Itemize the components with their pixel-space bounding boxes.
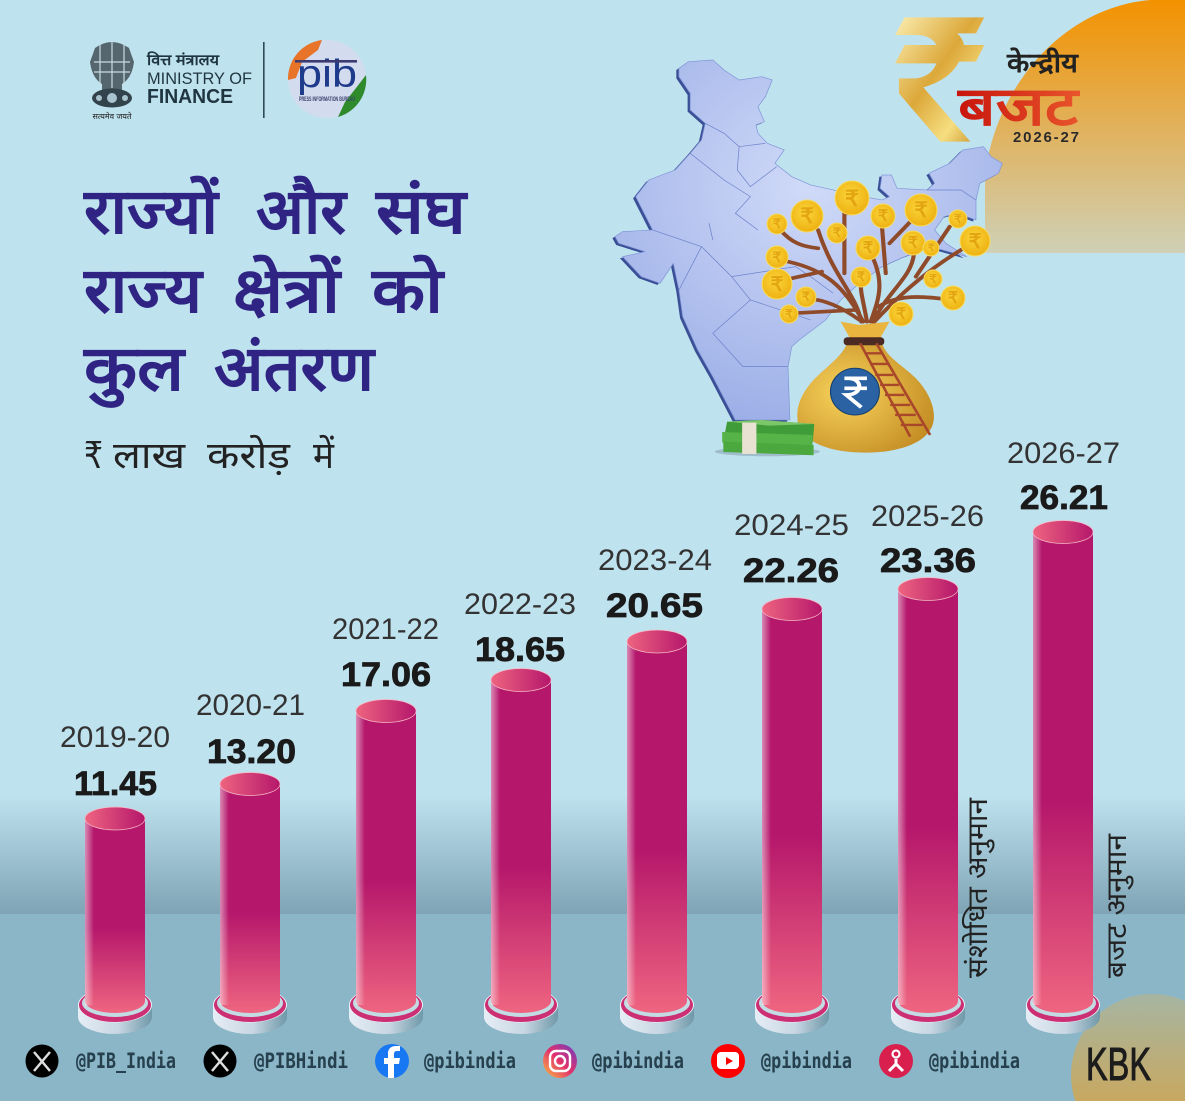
- gold coins: ₹: [800, 205, 814, 228]
- x handle india: [26, 1044, 176, 1078]
- title: संघ: [375, 177, 469, 247]
- gold coins: ₹: [896, 306, 906, 323]
- gold coins: ₹: [929, 272, 937, 286]
- gold coins: ₹: [845, 186, 859, 211]
- pib logo: pib: [297, 53, 357, 96]
- unit subtitle: में: [313, 434, 335, 476]
- illustration: budget logo: [895, 17, 1080, 146]
- bar: 2022-23: 2022-23: [464, 588, 576, 621]
- gold coins: ₹: [954, 212, 962, 226]
- orange corner panel: [985, 0, 1185, 253]
- ministry name: [146, 51, 252, 108]
- youtube handle: @pibindia: [761, 1049, 852, 1073]
- title: कुल: [83, 334, 186, 408]
- bar: 2019-20: 2019-20: [60, 721, 170, 754]
- bar: 2019-20: 11.45: [74, 765, 157, 803]
- illustration: india map with money tree: [612, 60, 1002, 456]
- bar: 2024-25: [734, 509, 849, 1034]
- budget wordmark: केन्द्रीय: [1006, 47, 1079, 78]
- gold coins: ₹: [773, 216, 782, 231]
- unit subtitle: लाख: [113, 435, 186, 476]
- bar: 2024-25: 22.26: [743, 552, 839, 590]
- bar: 2021-22: [332, 613, 439, 1034]
- gold coins: ₹: [857, 269, 866, 284]
- title: क्षेत्रों: [233, 254, 343, 326]
- pib logo: [288, 40, 366, 118]
- emblem caption: सत्यमेव जयते: [93, 111, 132, 121]
- facebook handle: [375, 1044, 516, 1078]
- x handle hindi: @PIBHindi: [254, 1049, 348, 1073]
- bar: 2023-24: 20.65: [606, 587, 703, 625]
- bar: 2024-25: 2024-25: [734, 509, 849, 542]
- budget wordmark: 2026-27: [1013, 129, 1079, 146]
- unit subtitle: ₹: [84, 435, 103, 476]
- bar: 2021-22: 2021-22: [332, 613, 439, 646]
- title: को: [371, 254, 446, 326]
- x handle india: @PIB_India: [76, 1049, 176, 1073]
- bar chart: [60, 437, 1134, 1034]
- unit subtitle: करोड़: [207, 434, 291, 476]
- gold coins: ₹: [802, 289, 811, 304]
- bar: 2026-27: [1007, 437, 1134, 1034]
- title: राज्यों: [83, 175, 221, 247]
- ministry name: MINISTRY OF: [147, 69, 252, 88]
- gold coins: ₹: [908, 235, 918, 252]
- bar: 2025-26: [871, 500, 995, 1034]
- gold coins: ₹: [833, 225, 842, 240]
- bar: 2025-26: 2025-26: [871, 500, 984, 533]
- bar: 2026-27: 2026-27: [1007, 437, 1120, 470]
- gold coins: ₹: [878, 208, 888, 225]
- money bag: [797, 322, 934, 453]
- gold coins: ₹: [928, 243, 935, 254]
- gold coins: ₹: [914, 199, 928, 222]
- bar: 2022-23: [464, 588, 576, 1034]
- x handle hindi: [204, 1044, 348, 1078]
- budget wordmark: [957, 47, 1080, 146]
- ministry of finance logo: [90, 40, 366, 121]
- pib logo: PRESS INFORMATION BUREAU: [299, 97, 355, 103]
- icon: state emblem: [90, 40, 134, 108]
- title: राज्य: [83, 256, 205, 326]
- gold coins: ₹: [948, 290, 958, 307]
- ministry name: वित्त मंत्रालय: [146, 51, 220, 69]
- bar: 2022-23: 18.65: [475, 631, 565, 669]
- gold coins: ₹: [771, 274, 784, 296]
- facebook handle: @pibindia: [424, 1049, 516, 1073]
- instagram handle: @pibindia: [592, 1049, 684, 1073]
- bar: 2020-21: 2020-21: [196, 689, 305, 722]
- india map: [612, 60, 1002, 422]
- gold coins: ₹: [785, 307, 793, 321]
- ministry name: FINANCE: [147, 86, 233, 108]
- note: budget estimate: बजट अनुमान: [1101, 834, 1134, 978]
- koo handle: @pibindia: [929, 1049, 1020, 1073]
- bar: 2021-22: 17.06: [341, 656, 431, 694]
- icon: golden rupee: [895, 17, 984, 142]
- unit subtitle: [84, 434, 335, 476]
- bar: 2023-24: [598, 544, 712, 1034]
- gold coins: ₹: [969, 231, 982, 253]
- bar: 2020-21: [196, 689, 305, 1034]
- bar: 2025-26: 23.36: [880, 542, 976, 580]
- money tree branches: [780, 213, 972, 322]
- youtube handle: [711, 1044, 852, 1078]
- gold coins: ₹: [773, 249, 782, 265]
- title: अंतरण: [214, 334, 377, 404]
- title: और: [256, 175, 348, 247]
- bar: 2023-24: 2023-24: [598, 544, 712, 577]
- social media row: [26, 1044, 1020, 1078]
- note: revised estimate: संशोधित अनुमान: [961, 798, 995, 978]
- KBK corner circle: [1071, 994, 1185, 1101]
- gold coins: [762, 181, 990, 326]
- bar: 2020-21: 13.20: [207, 733, 296, 771]
- gold coins: ₹: [863, 240, 873, 257]
- cash stacks: [715, 420, 820, 456]
- koo handle: [879, 1044, 1020, 1078]
- bar: 2019-20: [60, 721, 170, 1034]
- bar: 2026-27: 26.21: [1020, 479, 1108, 517]
- KBK mark: KBK: [1086, 1038, 1151, 1090]
- title: [83, 175, 469, 408]
- budget wordmark: बजट: [957, 77, 1080, 137]
- instagram handle: [543, 1044, 684, 1078]
